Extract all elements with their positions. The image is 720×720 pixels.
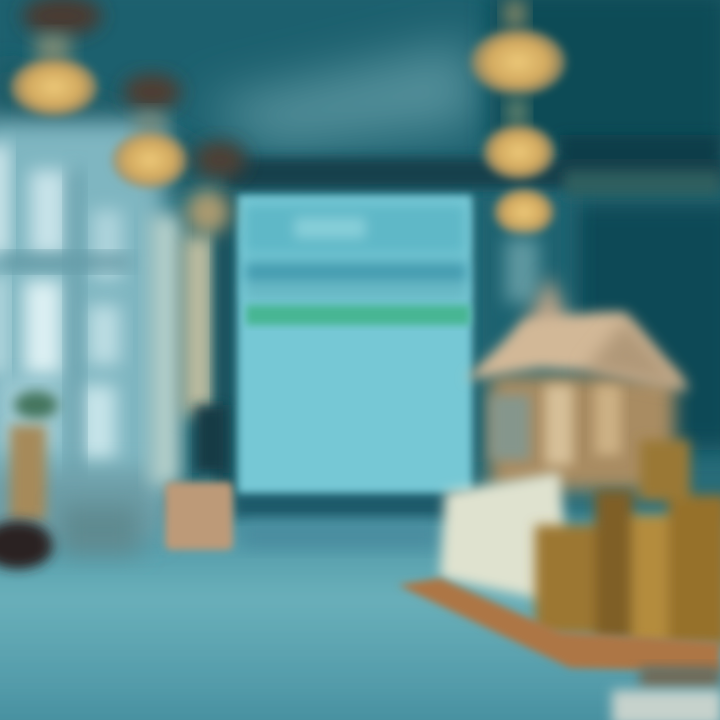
house spire: [515, 275, 578, 345]
lamp 6: [492, 187, 556, 303]
white stack of paper: [440, 472, 570, 605]
lamp 2: [110, 74, 190, 190]
floor: [0, 492, 720, 720]
display screen: [238, 195, 472, 493]
left pendant lamps: [8, 0, 246, 234]
lamp 5: [481, 98, 557, 181]
column: [150, 190, 233, 490]
wooden model house: [398, 275, 720, 720]
dark ceiling band: [225, 135, 720, 196]
lamp 4: [468, 0, 568, 97]
gold blocks: [535, 440, 720, 645]
potted plant on the left: [0, 391, 140, 569]
right pendant lamps: [468, 0, 568, 303]
lamp 1: [8, 0, 102, 118]
house body: [490, 375, 675, 490]
screen header block: [245, 205, 467, 300]
windows on the left wall: [0, 120, 165, 540]
wooden tray: [398, 578, 720, 672]
green bar on screen: [246, 305, 470, 325]
house roof: [465, 312, 690, 390]
lamp 3: [186, 141, 246, 234]
dark stand and tan pedestal: [165, 405, 233, 550]
